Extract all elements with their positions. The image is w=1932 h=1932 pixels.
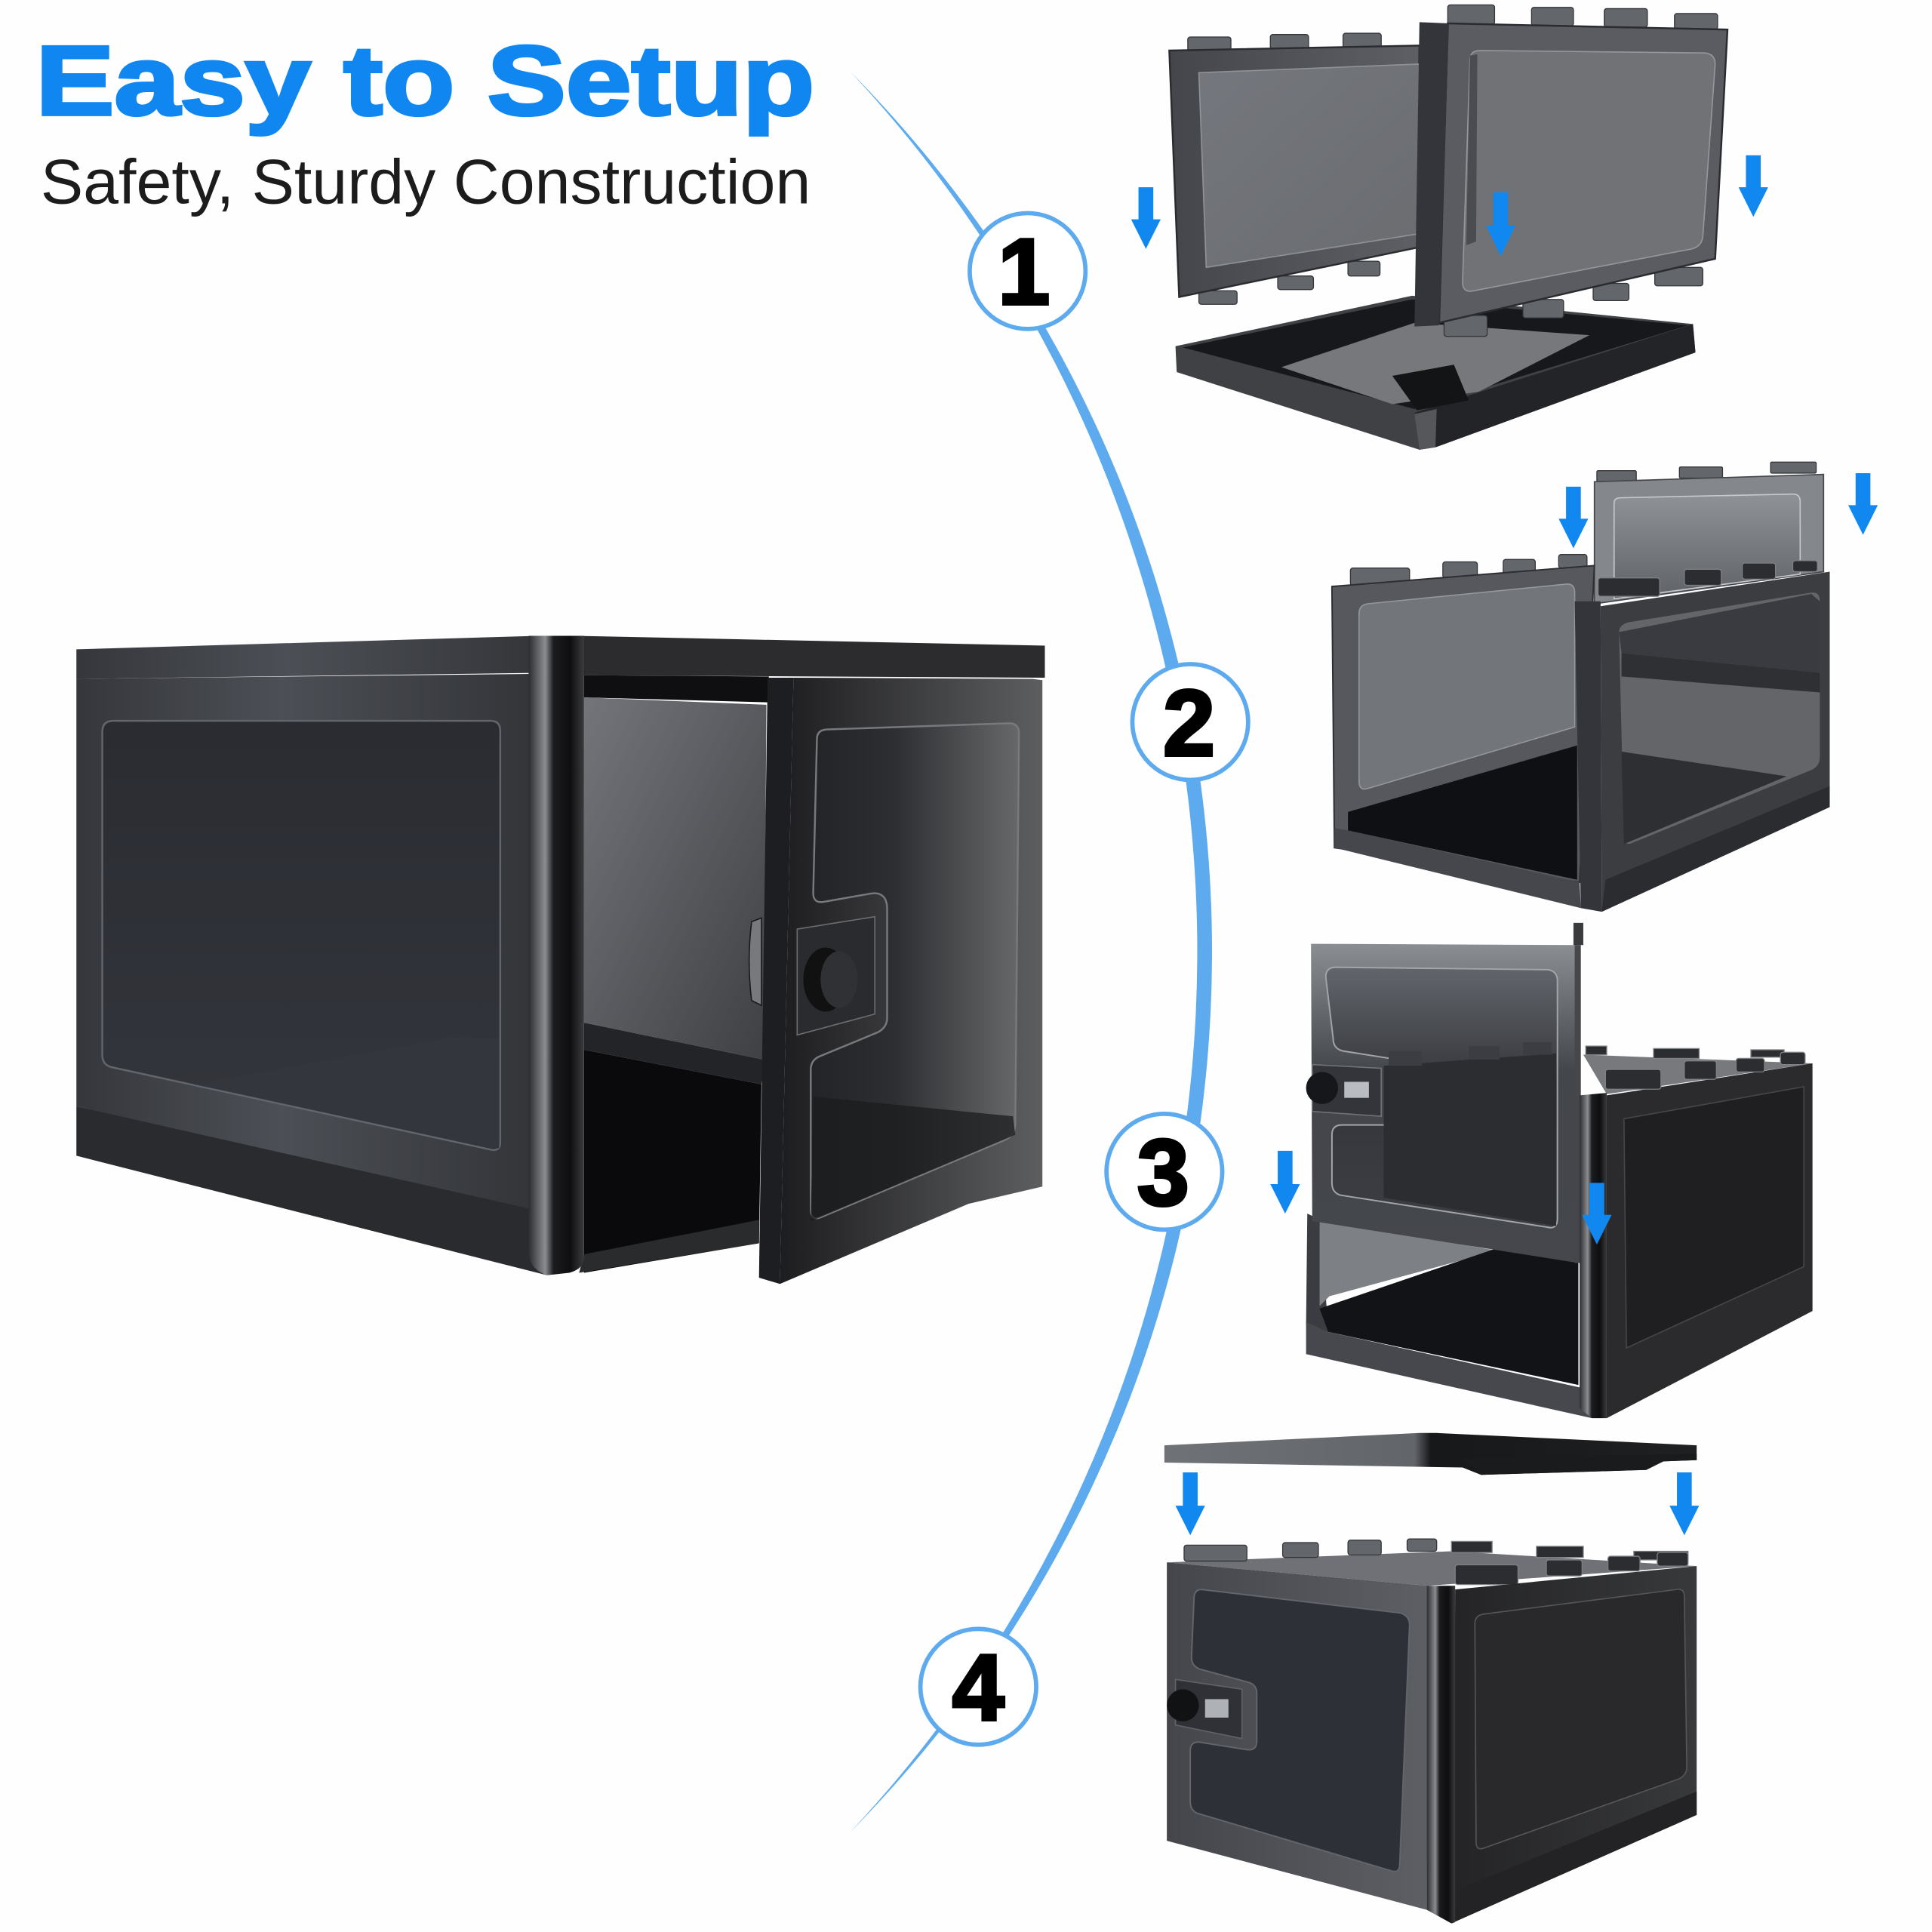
step 2 arrow right — [1848, 473, 1878, 535]
door face — [780, 678, 1042, 1284]
front panel tabs — [1447, 5, 1494, 25]
right window floor — [1622, 752, 1786, 844]
left window — [103, 721, 500, 1150]
right window — [1475, 1589, 1687, 1849]
top interior — [1583, 1055, 1813, 1094]
door hinge edge — [759, 678, 793, 1284]
step 3 arrow left — [1270, 1151, 1300, 1214]
interior lower shelf — [584, 1023, 764, 1084]
front panel post — [1414, 22, 1449, 327]
front base — [1334, 828, 1581, 908]
base — [1306, 1322, 1592, 1418]
lid — [1164, 1433, 1697, 1475]
step 3 badge: 3 — [1137, 1121, 1189, 1226]
step 1 badge — [970, 213, 1085, 329]
raised back panel tabs — [1597, 471, 1636, 481]
lid right face — [574, 635, 1044, 678]
step 3 arrow right — [1582, 1183, 1612, 1244]
door window — [811, 723, 1019, 1218]
lock knob — [1167, 1689, 1199, 1721]
front panel — [1439, 23, 1727, 323]
step 2 illustration: box with side walls — [1332, 462, 1829, 912]
right wall — [1607, 1063, 1813, 1418]
left wall tabs — [1350, 568, 1410, 586]
main product: assembled box with open door — [76, 635, 1044, 1284]
lock knob — [1306, 1072, 1338, 1104]
title: Easy to Setup — [35, 26, 814, 136]
step 4 badge: 4 — [952, 1636, 1004, 1740]
step 1 badge: 1 — [998, 220, 1050, 325]
left wall window — [1359, 584, 1575, 789]
step 2 badge: 2 — [1163, 672, 1215, 776]
step 3 illustration: door being inserted — [1306, 923, 1813, 1418]
base tray — [1176, 296, 1696, 450]
top tabs right — [1455, 1564, 1518, 1585]
subtitle: Safety, Sturdy Construction — [41, 146, 811, 217]
corner post — [1575, 601, 1601, 912]
lower glass — [1320, 1220, 1497, 1306]
window floor reflection — [193, 1038, 499, 1149]
top tabs left — [1184, 1545, 1247, 1561]
interior floor — [1348, 746, 1577, 880]
door — [749, 678, 1042, 1284]
top tabs back — [1451, 1541, 1492, 1552]
corner post — [528, 635, 584, 1275]
base strip — [76, 1106, 547, 1275]
right tabs — [1605, 1069, 1661, 1089]
door pin — [1574, 923, 1583, 945]
interior floor — [584, 1050, 761, 1273]
step 4 arrow right — [1669, 1472, 1699, 1535]
front panel inner bar — [1466, 54, 1478, 245]
step 1 arrow right — [1739, 155, 1768, 217]
step 1 illustration: panels and base tray — [1169, 5, 1727, 450]
step 4 illustration: lid placed on assembled box — [1164, 1433, 1697, 1924]
rear lock hardware — [749, 918, 761, 1005]
sliding door panel — [1311, 944, 1578, 1263]
right wall window — [1624, 1087, 1804, 1348]
left face — [1167, 1562, 1428, 1910]
floor — [1320, 1248, 1578, 1385]
back panel — [1169, 45, 1420, 297]
lower left frame — [1306, 1214, 1328, 1334]
corner post — [1580, 1093, 1607, 1418]
right wall window — [1619, 592, 1820, 844]
right face — [1454, 1566, 1697, 1922]
lock digits — [1344, 1081, 1369, 1098]
left window — [1190, 1589, 1410, 1872]
lock plate — [1312, 1065, 1381, 1116]
lock knob — [803, 948, 848, 1011]
step 2 arrow left — [1558, 487, 1588, 549]
right wall — [1601, 572, 1829, 912]
step 4 badge — [921, 1629, 1036, 1745]
right wall tabs — [1598, 578, 1660, 596]
curved timeline arc — [851, 72, 1212, 1832]
step 1 arrow center — [1486, 192, 1515, 257]
right window reflected shelf — [1622, 653, 1820, 693]
see-through tabs — [1383, 1054, 1556, 1226]
right window upper reflection — [1619, 594, 1820, 672]
step 1 arrow left — [1131, 187, 1161, 249]
step 2 badge — [1132, 664, 1248, 780]
interior back wall — [584, 697, 767, 1060]
step 3 badge — [1106, 1114, 1223, 1229]
interior upper rail — [584, 675, 769, 703]
lock plate — [797, 917, 875, 1035]
step 4 arrow left — [1176, 1472, 1205, 1535]
back tabs — [1586, 1046, 1607, 1055]
corner post — [1427, 1586, 1455, 1924]
left wall — [1332, 565, 1595, 882]
lock plate — [1176, 1679, 1242, 1739]
back panel tabs — [1188, 37, 1231, 52]
front panel window — [1463, 51, 1715, 291]
lock digits — [1205, 1699, 1229, 1718]
door window — [1326, 968, 1558, 1228]
lid left face — [76, 635, 547, 679]
back panel window — [1199, 64, 1420, 267]
left face — [76, 674, 530, 1214]
top interior — [1167, 1552, 1697, 1586]
raised back panel — [1595, 475, 1823, 604]
